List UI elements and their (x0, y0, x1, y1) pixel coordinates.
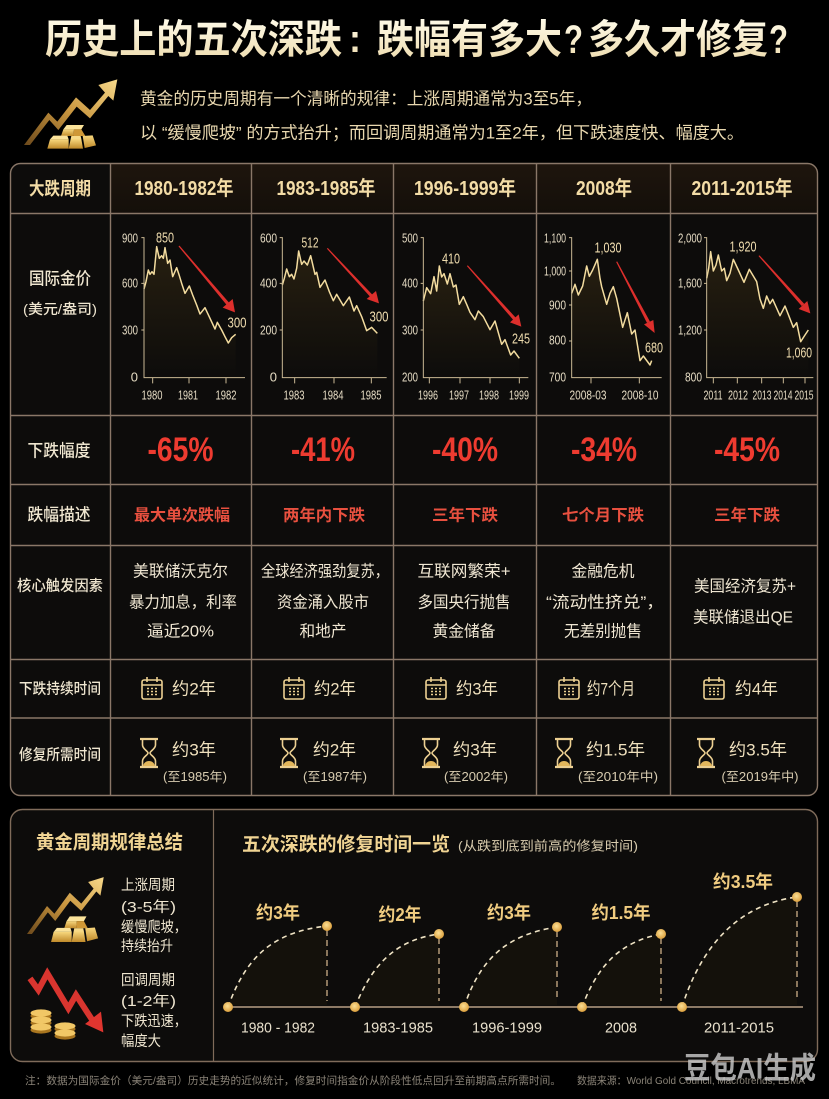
icon: bull cycle arrow with gold bars (27, 877, 104, 942)
chart: recovery timeline: 约1.5年 (592, 902, 650, 923)
chart: 1980-1982: 900 (122, 230, 138, 246)
chart: 1980-1982: 1981 (178, 388, 198, 402)
row: decline duration: 下跌持续时间 (19, 680, 101, 698)
header row: 1983-1985年 (276, 177, 376, 200)
row: core triggers: 黄金储备 (432, 622, 496, 640)
chart: 1980-1982: 850 (156, 230, 174, 246)
row: decline duration: 约2年 (172, 680, 216, 698)
header row: 1996-1999年 (414, 177, 516, 200)
chart: 2008 (544, 230, 663, 402)
row: core triggers: 和地产 (300, 622, 346, 640)
row: core triggers: 核心触发因素 (17, 576, 103, 594)
chart: recovery timeline: 约2年 (378, 904, 422, 925)
text: correction cycle: 回调周期 (121, 972, 175, 989)
row: core triggers: 美联储沃克尔 (133, 562, 228, 580)
chart: 2008: 2008-03 (570, 388, 606, 402)
row: decline duration (19, 677, 778, 699)
text: bull cycle: 持续抬升 (121, 938, 173, 955)
chart: 1983-1985: 1985 (360, 388, 382, 402)
chart: recovery timeline: 1980 - 1982 (241, 1020, 315, 1036)
heading: recovery overview: (从跌到底到前高的修复时间) (458, 838, 638, 854)
chart: 1983-1985: 1984 (322, 388, 344, 402)
row: core triggers: 金融危机 (572, 562, 634, 580)
chart: 2008: 680 (645, 340, 663, 356)
chart: 2011-2015: 2,000 (678, 230, 702, 246)
row: core triggers: 暴力加息，利率 (129, 594, 237, 612)
chart: 2011-2015: 2014 (774, 388, 792, 402)
chart: 2011-2015: 1,060 (786, 344, 812, 362)
row: recovery time (19, 739, 798, 784)
row label: gold price: 国际金价 (29, 268, 91, 288)
header row: 大跌周期 (29, 179, 91, 199)
row: core triggers: 逼近20% (147, 622, 214, 640)
panel: comparison table (10, 164, 818, 796)
chart: 1996-1999: 500 (402, 230, 418, 246)
chart: 2008: 800 (549, 332, 566, 348)
chart: 1983-1985: 0 (270, 370, 277, 384)
title: 历史上的五次深跌 (45, 18, 342, 62)
row: recovery time: 约1.5年 (586, 740, 645, 760)
row: decline percentage (28, 431, 780, 469)
row: decline description: 最大单次跌幅 (134, 506, 230, 524)
text: correction cycle: 下跌迅速， (121, 1013, 187, 1030)
row: core triggers: 无差别抛售 (564, 622, 642, 640)
chart: 1996-1999: 245 (512, 330, 530, 348)
chart: 1980-1982: 300 (228, 314, 246, 332)
chart: 1980-1982: 1980 (142, 388, 162, 402)
row: core triggers: 美联储退出QE (693, 608, 793, 626)
text: correction cycle: 幅度大 (121, 1033, 161, 1050)
chart: 1983-1985: 512 (302, 234, 318, 252)
row: decline percentage: -65% (148, 431, 214, 469)
chart: 2008: 1,030 (594, 240, 622, 256)
chart: 2008: 1,100 (544, 230, 566, 246)
chart: 1996-1999: 1999 (509, 388, 529, 402)
title: ? (769, 18, 788, 62)
row: core triggers: 资金涌入股市 (277, 594, 369, 612)
intro text: 黄金的历史周期有一个清晰的规律：上涨周期通常为3至5年， (140, 90, 592, 108)
chart: 1980-1982: 600 (122, 276, 138, 290)
chart: 2011-2015: 1,920 (730, 238, 756, 256)
text: correction cycle: (1-2年) (121, 993, 176, 1010)
chart: 1996-1999: 1996 (418, 388, 438, 402)
chart: 1983-1985: 400 (260, 276, 277, 290)
chart: 1996-1999: 400 (402, 276, 418, 290)
chart: recovery timeline: 2011-2015 (704, 1020, 774, 1036)
chart: 2011-2015: 800 (685, 370, 702, 384)
chart: 2011-2015: 2015 (794, 388, 814, 402)
icon: rising arrow with gold bars (24, 79, 117, 149)
row: decline description: 跌幅描述 (28, 506, 90, 524)
row: decline percentage: -34% (571, 431, 637, 469)
chart: 2011-2015: 1,200 (678, 322, 702, 338)
text: bull cycle (121, 877, 187, 955)
chart: 1983-1985: 600 (260, 230, 277, 246)
row: decline description: 两年内下跌 (283, 506, 365, 524)
row: recovery time: (至2019年中) (722, 769, 798, 784)
row: decline duration: 约4年 (735, 680, 778, 698)
heading: cycle summary: 黄金周期规律总结 (36, 830, 183, 854)
row: core triggers: 美国经济复苏+ (694, 578, 796, 596)
chart: 2011-2015: 2012 (728, 388, 748, 402)
row: decline description: 七个月下跌 (562, 506, 644, 524)
row: recovery time: 约2年 (313, 740, 356, 760)
footnote (25, 1074, 805, 1087)
row: recovery time: 约3年 (172, 740, 216, 760)
chart: 1983-1985: 1983 (284, 388, 304, 402)
panel: cycle summary and recovery overview (10, 810, 818, 1062)
row: decline description: 三年下跌 (714, 506, 780, 524)
title: : (349, 17, 361, 61)
header row (29, 177, 792, 200)
chart: 1996-1999 (402, 230, 530, 402)
chart: 1996-1999: 300 (402, 322, 418, 338)
footnote: 注：数据为国际金价（美元/盎司）历史走势的近似统计，修复时间指金价从阶段性低点回升至前期高点所需时间。 (25, 1074, 561, 1087)
chart: recovery timeline: 约3年 (256, 902, 300, 923)
chart: 1980-1982 (122, 230, 246, 402)
title: 多久才修复 (588, 18, 768, 62)
chart: 2008: 1,000 (544, 264, 566, 278)
chart: 2011-2015: 2011 (704, 388, 722, 402)
row: decline percentage: -45% (714, 431, 780, 469)
chart: 1983-1985: 200 (260, 322, 277, 338)
row: core triggers: “流动性挤兑”， (546, 594, 664, 612)
chart: 2008: 2008-10 (622, 388, 658, 402)
row: recovery time: (至2002年) (444, 770, 508, 784)
header row: 1980-1982年 (134, 177, 234, 200)
row: core triggers: 全球经济强劲复苏， (261, 562, 389, 580)
chart: recovery timeline (223, 871, 803, 1036)
chart: 1980-1982: 0 (131, 370, 138, 384)
row: recovery time: 约3.5年 (729, 740, 787, 760)
row: decline duration: 约7个月 (587, 680, 635, 698)
heading: recovery overview: 五次深跌的修复时间一览 (242, 834, 450, 856)
text: correction cycle (121, 972, 187, 1050)
text: bull cycle: 缓慢爬坡， (121, 919, 187, 936)
chart: 1996-1999: 410 (442, 250, 460, 268)
row: recovery time: 修复所需时间 (19, 746, 101, 764)
chart: recovery timeline: 约3.5年 (713, 871, 773, 892)
row: decline description: 三年下跌 (432, 506, 498, 524)
icon: correction arrow with coins (30, 973, 103, 1040)
row: recovery time: (至2010年中) (578, 769, 658, 784)
title: 跌幅有多大 (377, 18, 562, 62)
heading: recovery overview (242, 834, 638, 856)
chart: 2011-2015: 1,600 (678, 276, 702, 290)
row: recovery time: (至1987年) (303, 770, 367, 784)
intro text (140, 90, 744, 142)
row label: gold price (23, 268, 97, 317)
chart: 2011-2015: 2013 (752, 388, 772, 402)
chart: 2008: 900 (549, 298, 566, 312)
row: decline percentage: 下跌幅度 (28, 442, 90, 460)
row: core triggers: 多国央行抛售 (418, 594, 510, 612)
chart: 1996-1999: 1997 (449, 388, 469, 402)
chart: 2008: 700 (549, 370, 566, 384)
title: ? (564, 18, 583, 62)
row: recovery time: 约3年 (453, 740, 497, 760)
row label: gold price: (美元/盎司) (23, 301, 97, 317)
chart: 1996-1999: 1998 (479, 388, 499, 402)
chart: recovery timeline: 1996-1999 (472, 1020, 542, 1036)
intro text: 以 “缓慢爬坡” 的方式抬升；而回调周期通常为1至2年，但下跌速度快、幅度大。 (140, 122, 744, 142)
chart: 1980-1982: 1982 (216, 388, 236, 402)
text: bull cycle: (3-5年) (121, 899, 176, 916)
header row: 2011-2015年 (692, 177, 792, 200)
row: decline description (28, 506, 780, 524)
row: decline percentage: -40% (432, 431, 498, 469)
row: core triggers (17, 562, 796, 640)
text: bull cycle: 上涨周期 (121, 877, 175, 894)
row: decline percentage: -41% (291, 431, 355, 469)
chart: 1980-1982: 300 (122, 322, 138, 338)
chart: recovery timeline: 约3年 (487, 902, 531, 923)
chart: 2011-2015 (678, 230, 814, 402)
chart: 1983-1985 (260, 230, 388, 402)
row: decline duration: 约2年 (314, 680, 356, 698)
footnote: 数据来源：World Gold Council, Macrotrends, LBMA (577, 1074, 805, 1087)
chart: 1996-1999: 200 (402, 370, 418, 384)
row: recovery time: (至1985年) (163, 770, 227, 784)
chart: recovery timeline: 2008 (605, 1020, 637, 1036)
row: core triggers: 互联网繁荣+ (418, 562, 510, 580)
chart: 1983-1985: 300 (370, 308, 388, 326)
row: decline duration: 约3年 (456, 680, 498, 698)
chart: recovery timeline: 1983-1985 (363, 1020, 433, 1036)
header row: 2008年 (576, 177, 632, 200)
title (45, 17, 788, 62)
